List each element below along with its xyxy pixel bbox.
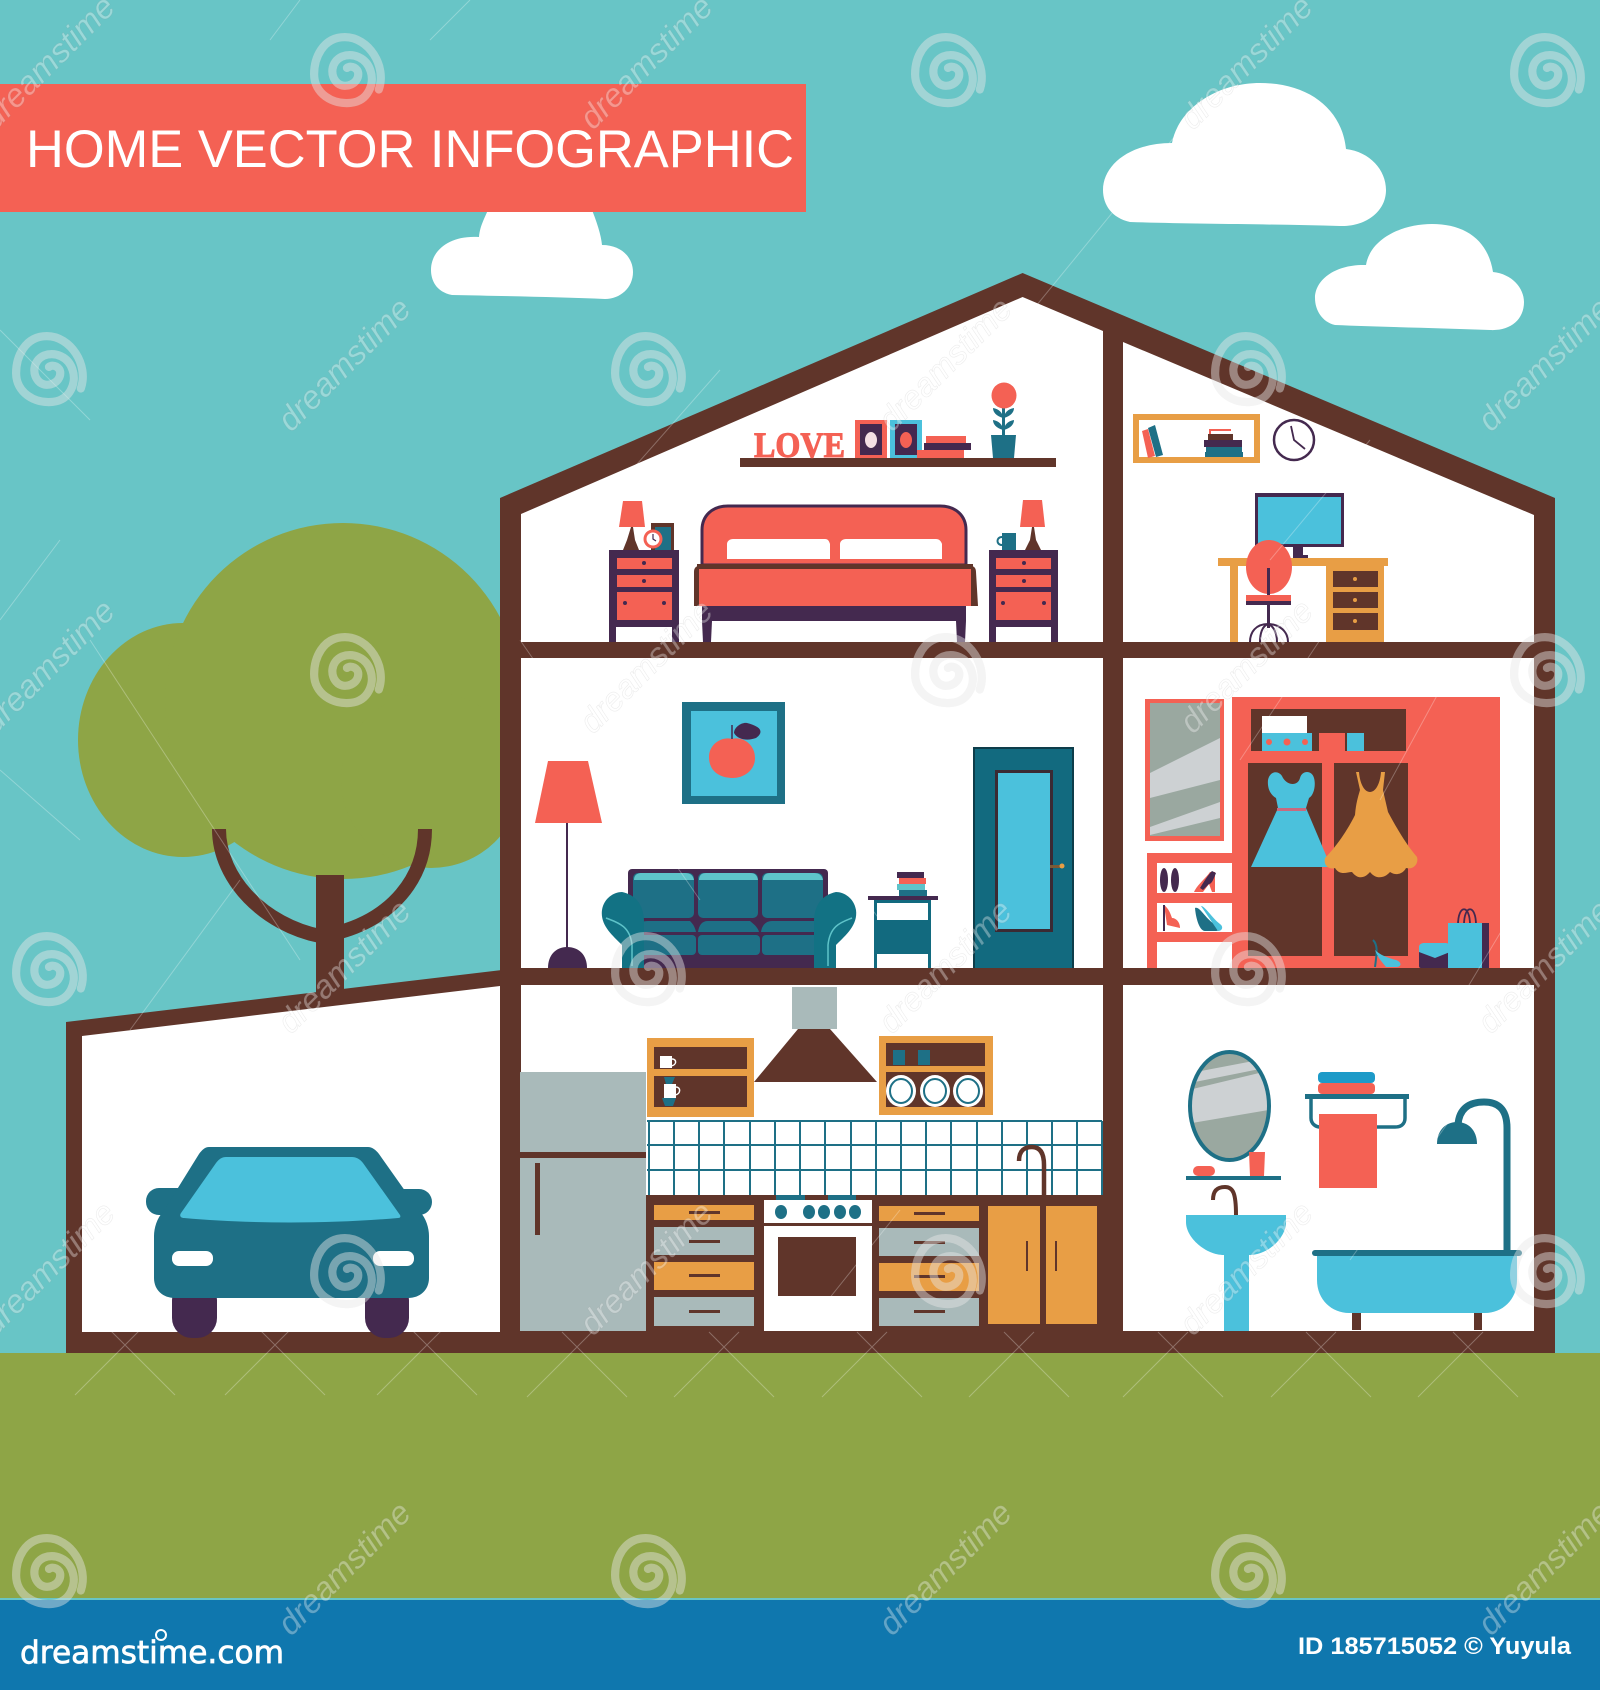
kitchen faucet xyxy=(1019,1147,1044,1195)
towel rack xyxy=(1305,1072,1409,1188)
wall mirror xyxy=(1145,699,1224,841)
garage xyxy=(66,970,502,1353)
door xyxy=(973,747,1074,968)
floor lamp xyxy=(535,761,602,968)
shoe rack xyxy=(1147,853,1233,968)
monitor xyxy=(1255,493,1344,559)
shopping bag xyxy=(1448,909,1489,968)
car xyxy=(146,1147,432,1338)
bedroom xyxy=(609,382,1058,642)
wall shelf with ornaments xyxy=(740,382,1056,467)
sofa xyxy=(602,869,856,968)
extractor hood xyxy=(754,987,877,1082)
bookshelf xyxy=(1136,417,1257,460)
kitchen xyxy=(520,987,1103,1331)
blue dress xyxy=(1251,772,1331,867)
desk xyxy=(1218,558,1388,642)
cloud: large right xyxy=(1103,83,1386,226)
wall clock xyxy=(1274,420,1314,460)
tile backsplash xyxy=(647,1121,1102,1195)
stove xyxy=(764,1195,872,1331)
handbag xyxy=(1419,943,1450,968)
watermark overlay: dreamstime xyxy=(270,892,418,1040)
dressing room xyxy=(1145,697,1500,968)
side table with books xyxy=(868,872,938,968)
wardrobe xyxy=(1232,697,1500,968)
title banner: HOME VECTOR INFOGRAPHIC xyxy=(26,120,794,179)
footer bar xyxy=(0,1598,1600,1690)
left cupboard xyxy=(647,1038,754,1117)
watermark overlay: dreamstime xyxy=(572,1194,720,1342)
office xyxy=(1136,417,1388,642)
left nightstand xyxy=(609,501,679,642)
right cupboard xyxy=(879,1036,993,1115)
sink xyxy=(1186,1187,1286,1331)
watermark overlay: dreamstime xyxy=(270,1494,418,1642)
chair xyxy=(1246,540,1292,642)
watermark overlay: dreamstime xyxy=(572,592,720,740)
tree xyxy=(78,523,521,1000)
bathroom xyxy=(1180,1050,1522,1331)
wall shelf with ornaments: LOVE xyxy=(754,425,845,465)
base cabinets xyxy=(646,1195,1103,1331)
heel shoe xyxy=(1373,940,1400,967)
bed xyxy=(694,506,978,642)
shower xyxy=(1437,1102,1507,1250)
apple picture xyxy=(682,702,785,804)
watermark overlay: dreamstime xyxy=(871,290,1019,438)
watermark overlay: dreamstime xyxy=(270,290,418,438)
bathroom shelf xyxy=(1186,1152,1281,1180)
watermark overlay: dreamstime xyxy=(1172,592,1320,740)
cloud: far right xyxy=(1315,224,1524,330)
footer bar: dreamstime.com xyxy=(20,1635,284,1671)
watermark overlay: dreamstime xyxy=(1172,1194,1320,1342)
house shell xyxy=(500,273,1555,1353)
fridge xyxy=(520,1072,646,1331)
footer bar: ID 185715052 © Yuyula xyxy=(1298,1633,1572,1660)
oval mirror xyxy=(1188,1050,1271,1162)
watermark overlay: dreamstime xyxy=(871,1494,1019,1642)
cloud: small centre xyxy=(431,205,633,299)
watermark overlay: dreamstime xyxy=(871,892,1019,1040)
orange dress xyxy=(1325,772,1417,877)
bathtub xyxy=(1312,1250,1522,1330)
ground xyxy=(0,1353,1600,1598)
title banner xyxy=(0,84,806,212)
living room xyxy=(535,702,1074,968)
right nightstand xyxy=(989,500,1058,642)
